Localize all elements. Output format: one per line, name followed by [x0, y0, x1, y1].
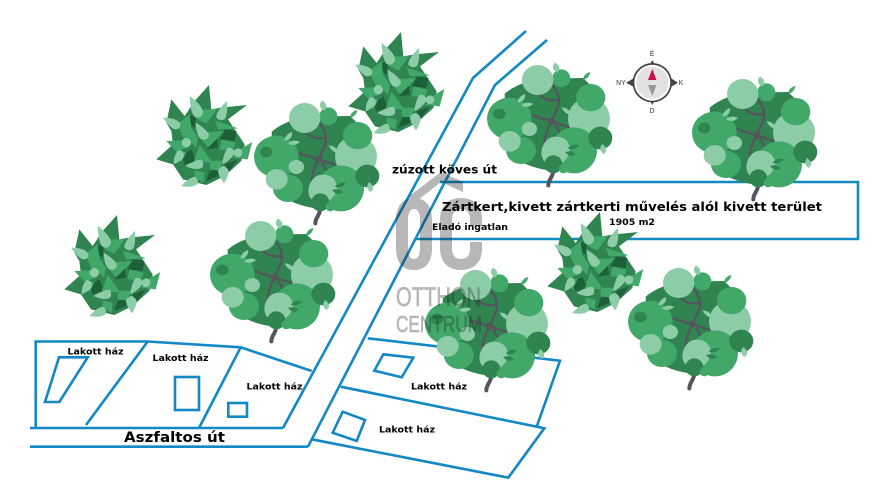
icon: compass — [616, 49, 684, 115]
round tree 5 — [425, 268, 550, 390]
label: house 2: Lakott ház — [152, 354, 208, 364]
parcels: left row — [30, 342, 312, 447]
round tree 2 — [487, 63, 612, 185]
house outline 3 — [228, 403, 247, 417]
house outline 2 — [175, 377, 199, 410]
label: area: 1905 m2 — [609, 218, 655, 228]
label: house 3: Lakott ház — [246, 382, 302, 392]
icon: compass: É — [650, 49, 655, 58]
label: road: zúzott köves út — [392, 162, 498, 176]
label: for sale: Eladó ingatlan — [432, 222, 508, 233]
round tree 6 — [628, 266, 753, 388]
round tree 3 — [692, 77, 817, 199]
label: house 5: Lakott ház — [379, 426, 435, 436]
spiky tree 4 — [547, 212, 643, 314]
house outline 1 — [45, 357, 88, 402]
label: plot title: Zártkert,kivett zártkerti művelés alól kivett terület — [442, 200, 822, 214]
parcel: right upper plot — [368, 338, 560, 427]
house outline 5 — [333, 412, 365, 441]
label: house 1: Lakott ház — [68, 348, 124, 358]
icon: compass: D — [649, 108, 655, 115]
label: asphalt road: Aszfaltos út — [124, 430, 225, 446]
logo: Otthon Centrum: CENTRUM — [396, 311, 482, 337]
icon: compass: NY — [616, 80, 626, 87]
house outline 4 — [374, 354, 413, 377]
plot rectangle — [416, 182, 858, 239]
spiky tree 2 — [348, 32, 444, 134]
label: house 4: Lakott ház — [411, 382, 467, 392]
spiky tree 3 — [64, 215, 160, 317]
logo: Otthon Centrum — [396, 172, 482, 337]
round tree 4 — [210, 219, 335, 341]
icon: compass: K — [678, 80, 684, 87]
logo: Otthon Centrum: OTTHON — [396, 282, 481, 312]
parcels: right row — [312, 387, 544, 478]
spiky tree 1 — [156, 85, 252, 187]
round tree 1 — [254, 101, 379, 223]
road: crushed stone — [283, 31, 547, 447]
